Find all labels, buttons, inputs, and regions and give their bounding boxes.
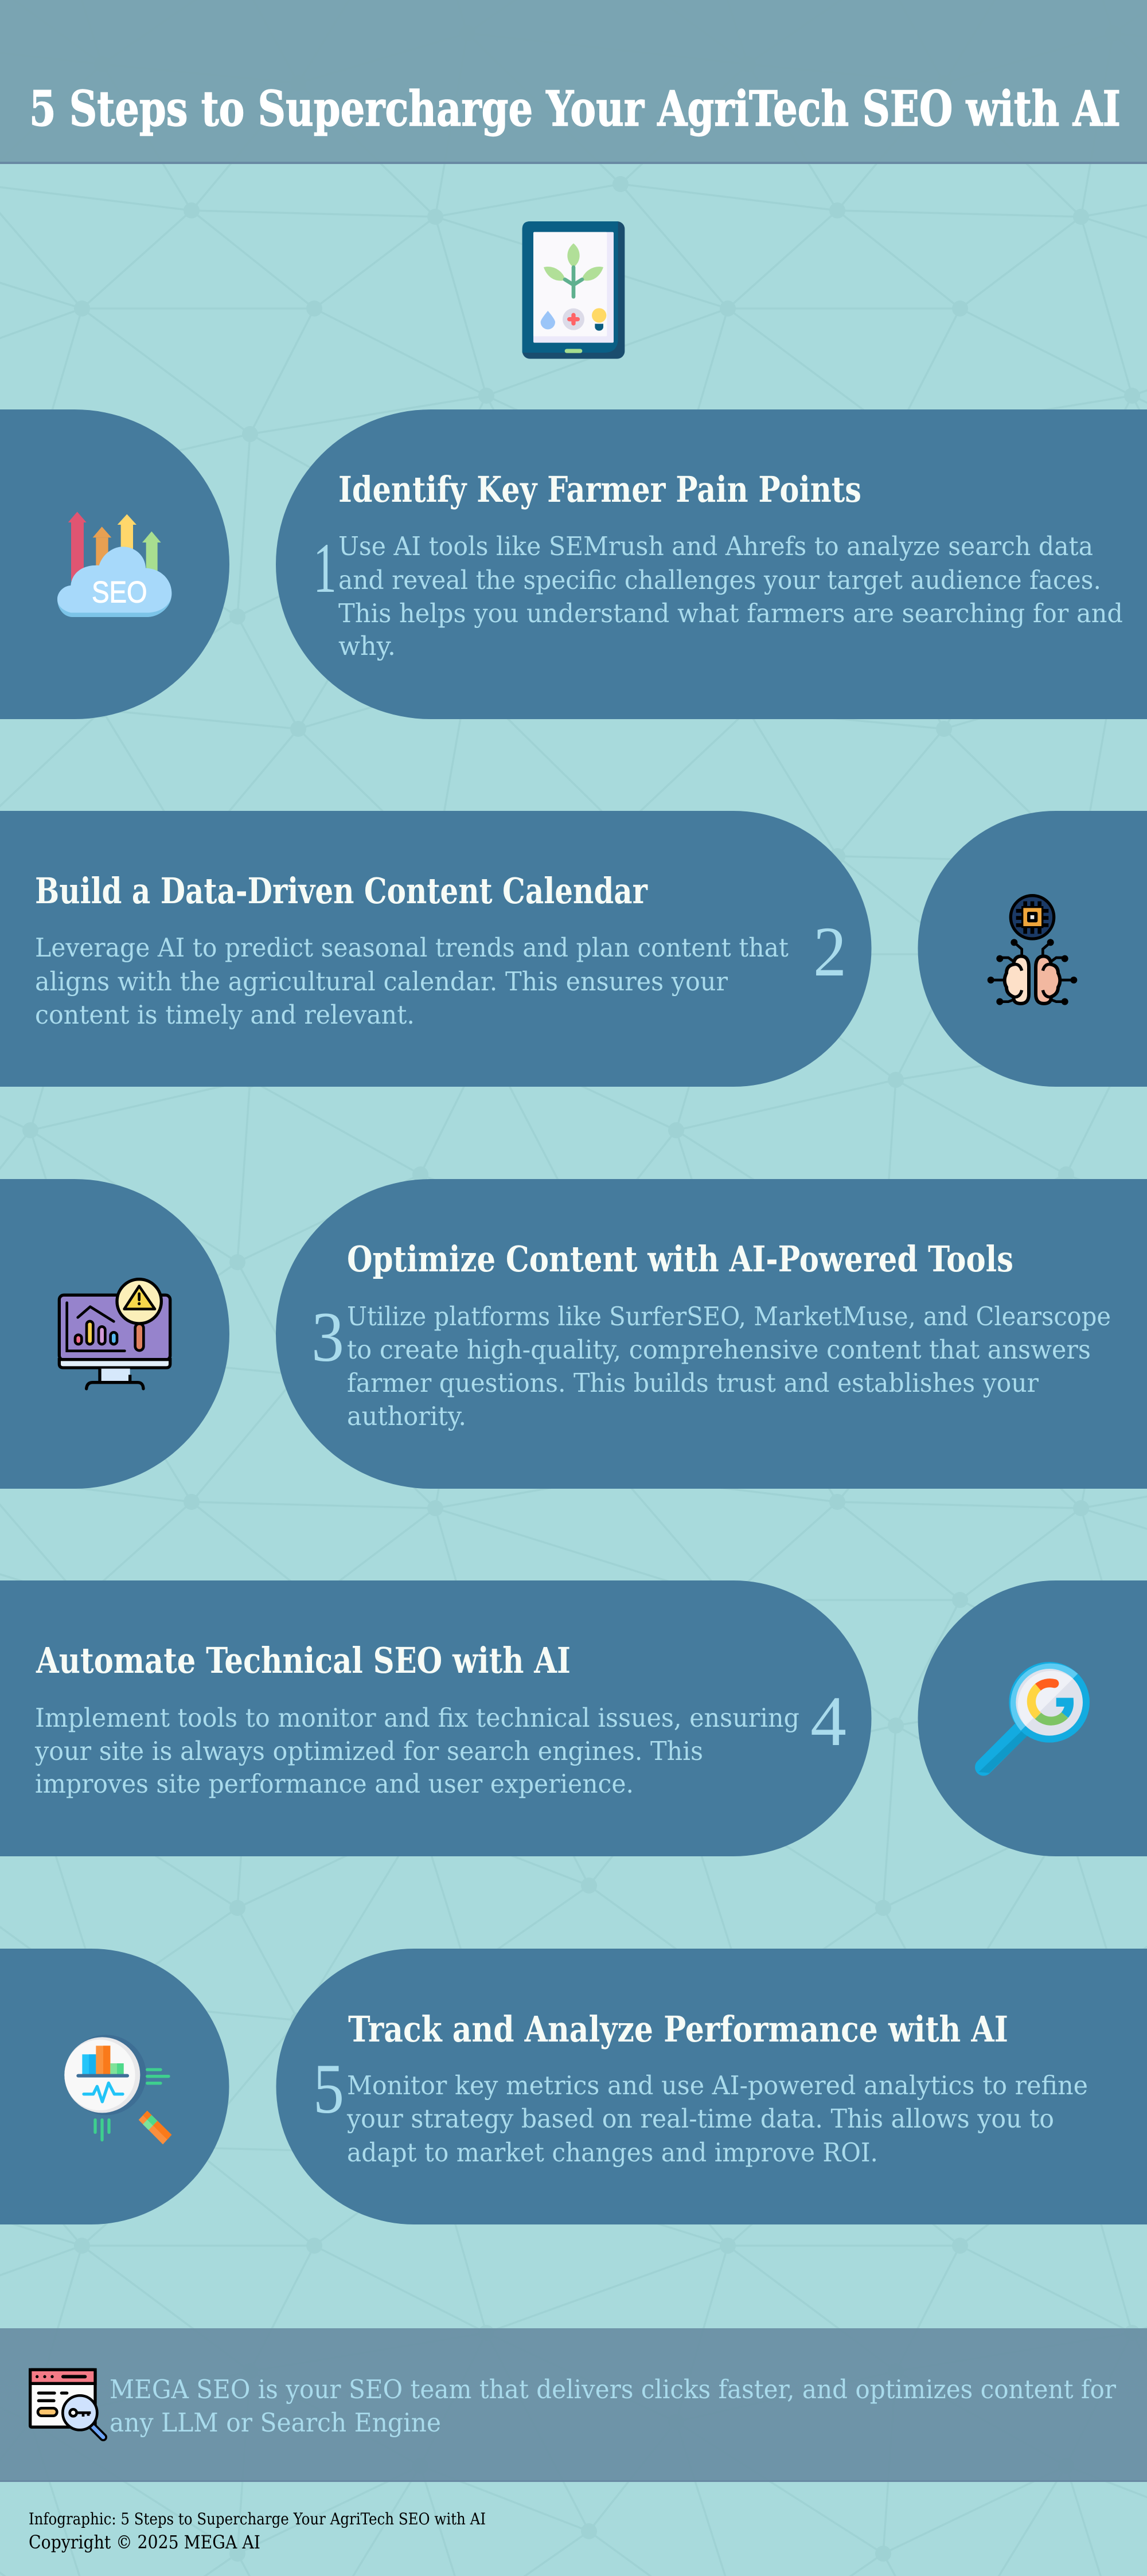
heading: Optimize Content with AI-Powered Tools <box>347 1238 1013 1280</box>
body text: farmer questions. This builds trust and establishes your <box>347 1368 1039 1398</box>
panel: call to action band <box>0 2328 1147 2482</box>
body text: why. <box>338 631 396 661</box>
body text: Implement tools to monitor and fix technical issues, ensuring <box>35 1703 799 1733</box>
body text: your site is always optimized for search engines. This <box>34 1736 703 1766</box>
panel: step 4 <box>0 1580 1147 1856</box>
icon: SEO cloud with arrows <box>57 512 171 617</box>
heading: Track and Analyze Performance with AI <box>348 2008 1008 2050</box>
header band with title <box>0 0 1147 164</box>
icon: SEO cloud with arrows: SEO <box>92 576 147 610</box>
body text: to create high-quality, comprehensive content that answers <box>347 1334 1091 1365</box>
body text <box>347 1301 1111 1431</box>
body text: improves site performance and user experience. <box>35 1769 634 1799</box>
heading: Build a Data-Driven Content Calendar <box>35 870 648 912</box>
heading: Identify Key Farmer Pain Points <box>338 469 861 510</box>
body text <box>338 531 1123 661</box>
icon: analytics magnifier <box>64 2035 171 2144</box>
body text <box>35 932 789 1030</box>
body text: adapt to market changes and improve ROI. <box>347 2137 878 2168</box>
call to action text: any LLM or Search Engine <box>110 2407 441 2438</box>
icon: tablet with plant <box>522 221 625 359</box>
step number 4: 4 <box>810 1682 846 1761</box>
step number 5: 5 <box>313 2050 344 2128</box>
body text: This helps you understand what farmers are searching for and <box>338 598 1123 629</box>
panel: step 3 <box>0 1179 1147 1489</box>
body text: authority. <box>347 1401 466 1431</box>
footer credits: Copyright © 2025 MEGA AI <box>29 2531 260 2553</box>
panel: step 2 <box>0 811 1147 1087</box>
body text: and reveal the specific challenges your target audience faces. <box>338 565 1101 595</box>
icon: Google magnifier <box>979 1662 1090 1773</box>
panel: step 1 <box>0 409 1147 719</box>
body text: Use AI tools like SEMrush and Ahrefs to analyze search data <box>338 531 1093 561</box>
body text: your strategy based on real-time data. This allows you to <box>346 2103 1054 2134</box>
icon: browser with key magnifier <box>30 2370 103 2437</box>
heading: Automate Technical SEO with AI <box>36 1640 571 1681</box>
step number 2: 2 <box>813 912 846 991</box>
step number 3: 3 <box>311 1298 344 1376</box>
body text: Monitor key metrics and use AI-powered analytics to refine <box>347 2070 1088 2101</box>
footer credits <box>29 2509 486 2553</box>
step number 1: 1 <box>313 529 337 607</box>
body text: Leverage AI to predict seasonal trends and plan content that <box>35 932 789 963</box>
call to action text <box>110 2374 1116 2438</box>
icon: monitor with warning magnifier <box>59 1279 170 1389</box>
panel: step 5 <box>0 1949 1147 2224</box>
body text <box>346 2070 1088 2168</box>
body text <box>34 1703 799 1799</box>
footer credits: Infographic: 5 Steps to Supercharge Your AgriTech SEO with AI <box>29 2509 486 2528</box>
icon: AI chip and brain <box>988 896 1077 1005</box>
body text: aligns with the agricultural calendar. This ensures your <box>35 966 728 997</box>
body text: content is timely and relevant. <box>35 1000 415 1030</box>
